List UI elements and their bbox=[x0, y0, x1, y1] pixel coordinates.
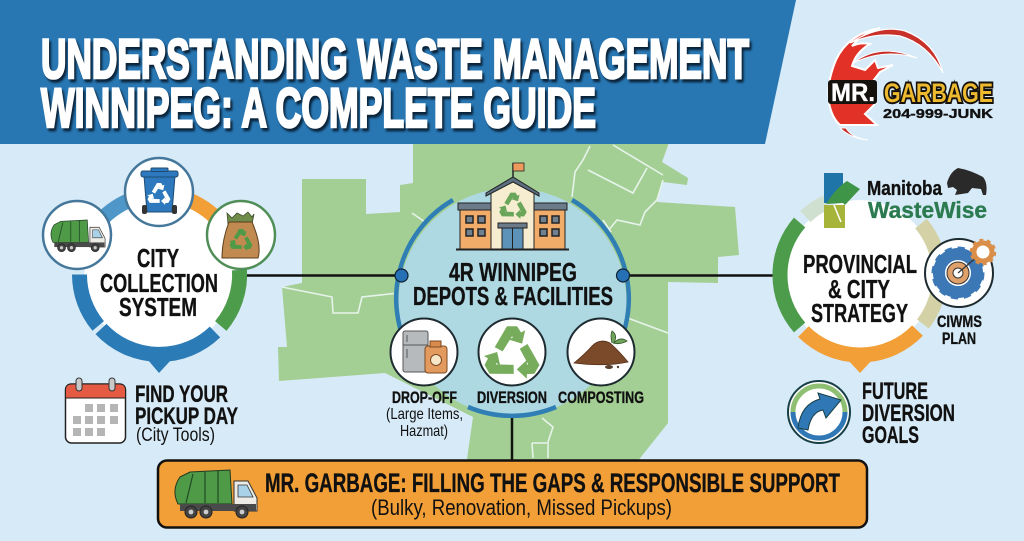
heading: CITY bbox=[137, 243, 179, 273]
labels bbox=[386, 388, 644, 440]
heading: 4R WINNIPEG bbox=[449, 257, 577, 287]
icon: recycling bin bbox=[125, 158, 193, 226]
label: CIWMS plan bbox=[937, 312, 982, 348]
text: future diversion goals: FUTURE bbox=[862, 378, 928, 405]
heading: COLLECTION bbox=[100, 268, 218, 298]
icon: drop-off bbox=[390, 318, 458, 386]
panel: 4R Winnipeg depots and facilities bbox=[386, 163, 644, 440]
ring and pointer bbox=[80, 194, 240, 373]
connector: depots to support bar bbox=[511, 416, 513, 462]
title bbox=[41, 27, 749, 139]
bar subtitle: (Bulky, Renovation, Missed Pickups) bbox=[371, 495, 672, 520]
icon: compost pile bbox=[568, 318, 634, 386]
heading: & CITY bbox=[828, 274, 890, 304]
Mr. Garbage logo bbox=[828, 28, 994, 140]
header banner bbox=[0, 0, 796, 144]
icon: compost bag bbox=[207, 201, 275, 269]
heading bbox=[100, 243, 218, 322]
heading: DEPOTS & FACILITIES bbox=[413, 281, 613, 311]
icon: bar truck bbox=[175, 470, 257, 518]
text: future diversion goals: GOALS bbox=[862, 422, 919, 449]
icon: future diversion goals bbox=[788, 381, 850, 443]
labels: DIVERSION bbox=[477, 388, 547, 407]
icon: CIWMS gear target bbox=[925, 239, 995, 307]
panel: Mr. Garbage support bar bbox=[158, 460, 867, 528]
connector: collection to depots bbox=[247, 274, 400, 277]
text: find your pickup day: PICKUP DAY bbox=[135, 403, 238, 430]
text: find your pickup day: (City Tools) bbox=[136, 425, 215, 446]
title: WINNIPEG: A COMPLETE GUIDE bbox=[41, 76, 596, 139]
text: find your pickup day bbox=[135, 381, 238, 446]
Manitoba WasteWise logo: Manitoba bbox=[867, 178, 943, 200]
heading: PROVINCIAL bbox=[803, 249, 917, 279]
labels: (Large Items, bbox=[386, 406, 463, 423]
label: CIWMS plan: PLAN bbox=[942, 329, 976, 348]
panel: provincial and city strategy bbox=[780, 200, 995, 373]
text: find your pickup day: FIND YOUR bbox=[135, 381, 228, 408]
label: CIWMS plan: CIWMS bbox=[937, 312, 982, 331]
Manitoba WasteWise logo bbox=[824, 168, 987, 228]
Manitoba WasteWise logo: WasteWise bbox=[868, 197, 987, 223]
text: future diversion goals: DIVERSION bbox=[862, 400, 955, 427]
labels: Hazmat) bbox=[400, 423, 448, 440]
text: future diversion goals bbox=[862, 378, 955, 449]
connector: depots to strategy bbox=[625, 274, 775, 277]
icon: facility building bbox=[456, 163, 569, 250]
heading bbox=[413, 257, 613, 311]
labels: DROP-OFF bbox=[392, 388, 457, 407]
Mr. Garbage logo: MR. bbox=[831, 79, 875, 107]
heading: SYSTEM bbox=[119, 292, 197, 322]
icon: calendar bbox=[66, 378, 126, 443]
heading: STRATEGY bbox=[811, 298, 908, 328]
icon: garbage truck bbox=[43, 201, 111, 269]
labels: COMPOSTING bbox=[558, 388, 644, 407]
panel: city collection system bbox=[43, 158, 275, 373]
ring and pointer bbox=[780, 200, 940, 373]
Mr. Garbage logo: GARBAGE bbox=[884, 78, 993, 108]
map of Winnipeg bbox=[278, 140, 739, 466]
hub circle bbox=[395, 188, 630, 416]
icon: diversion recycling bbox=[478, 318, 546, 386]
Mr. Garbage logo: 204-999-JUNK bbox=[883, 106, 994, 121]
heading bbox=[803, 249, 917, 328]
